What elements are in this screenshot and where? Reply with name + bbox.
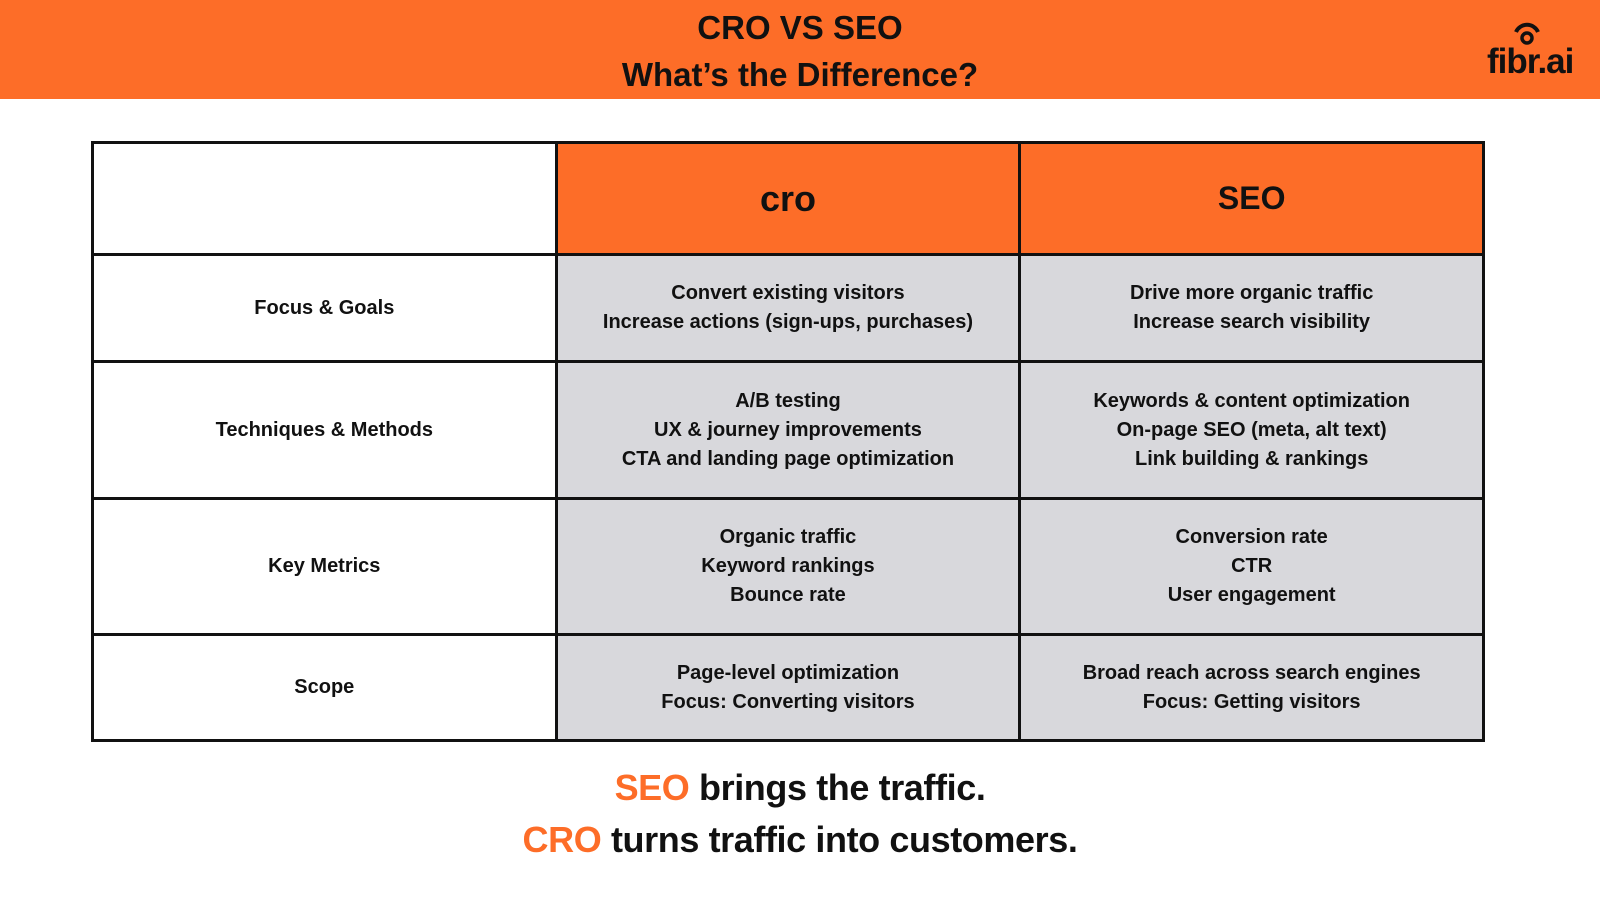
comparison table: Keyword rankings (701, 555, 875, 577)
comparison table: CTR (1231, 555, 1272, 577)
comparison table: cro (760, 178, 816, 219)
comparison table: Bounce rate (730, 584, 846, 606)
comparison table: Page-level optimization (677, 662, 899, 684)
comparison table: CTA and landing page optimization (622, 448, 954, 470)
title: CRO VS SEO (697, 9, 903, 46)
comparison table: User engagement (1168, 584, 1336, 606)
comparison table: Organic traffic (720, 526, 856, 548)
comparison table: Conversion rate (1176, 526, 1328, 548)
row: focus & goals (254, 256, 1482, 360)
comparison table: Focus: Getting visitors (1143, 690, 1361, 712)
comparison table: Keywords & content optimization (1093, 390, 1410, 412)
header bar (0, 0, 1600, 99)
comparison table: A/B testing (735, 390, 841, 412)
title (622, 9, 978, 93)
bottom tagline: SEO brings the traffic. (615, 767, 985, 808)
comparison table: On-page SEO (meta, alt text) (1117, 418, 1387, 440)
row: focus & goals: Convert existing visitors (671, 282, 905, 304)
row: focus & goals: Increase actions (sign-ups, purchases) (603, 311, 973, 333)
comparison table: Scope (294, 676, 354, 698)
row: focus & goals: Increase search visibility (1133, 311, 1370, 333)
bottom tagline (523, 767, 1077, 860)
bottom tagline: CRO turns traffic into customers. (523, 819, 1077, 860)
logo (1487, 22, 1573, 81)
comparison table: Broad reach across search engines (1083, 662, 1421, 684)
title: What’s the Difference? (622, 56, 978, 93)
comparison table: Key Metrics (268, 555, 380, 577)
comparison table: SEO (1218, 180, 1285, 216)
comparison table: UX & journey improvements (654, 418, 922, 440)
logo: fibr.ai (1487, 42, 1573, 81)
row: focus & goals: Focus & Goals (254, 296, 394, 318)
comparison table: Focus: Converting visitors (661, 690, 915, 712)
row: focus & goals: Drive more organic traffic (1130, 282, 1373, 304)
comparison table (91, 141, 1485, 742)
comparison table: Link building & rankings (1135, 448, 1368, 470)
comparison table: Techniques & Methods (216, 418, 433, 440)
